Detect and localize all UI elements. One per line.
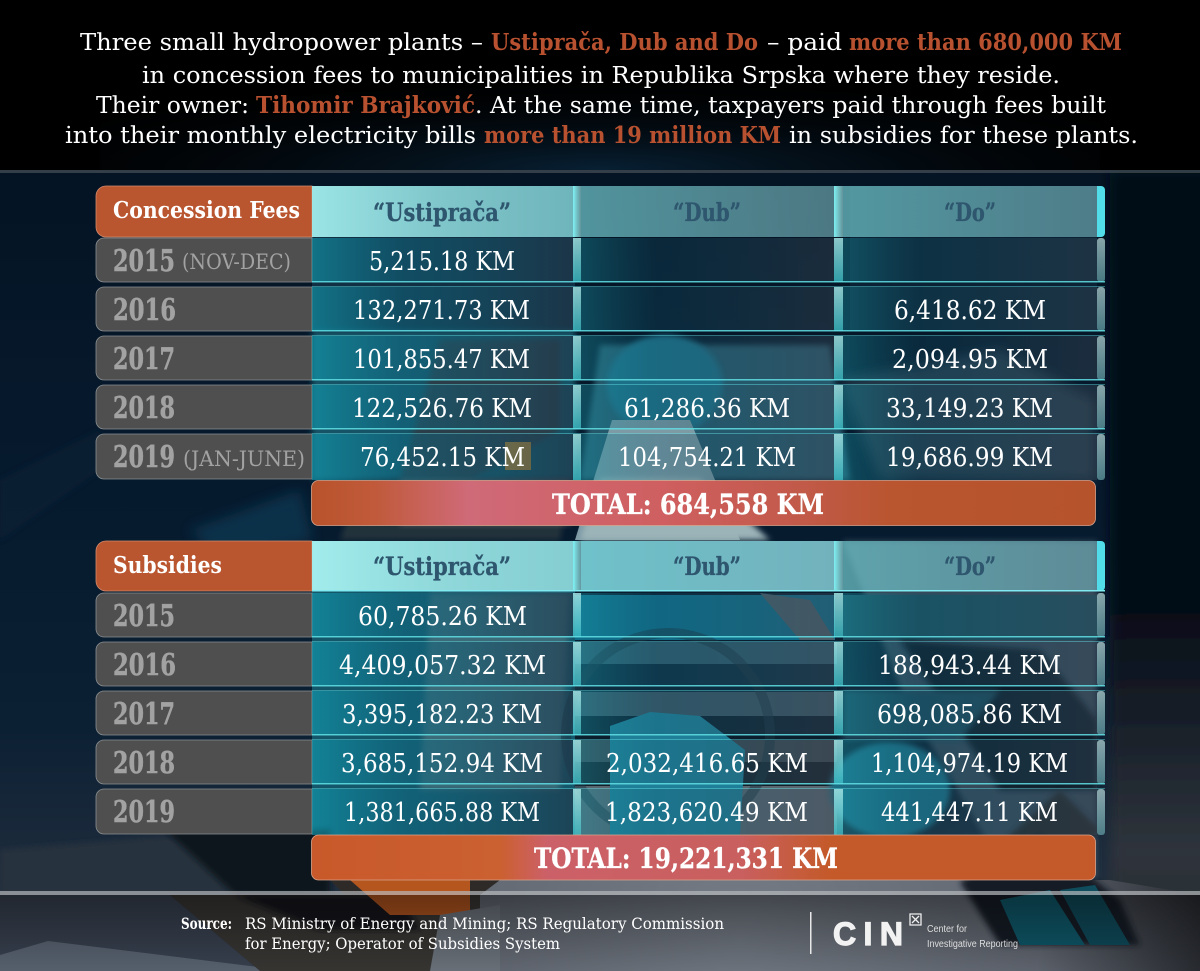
header row: “Ustiprača” (373, 198, 511, 227)
row 2018 (96, 384, 1105, 430)
header row: “Do” (944, 198, 996, 227)
row 2017: 2017 (113, 697, 175, 732)
row 2015: 2015 (113, 244, 175, 279)
intro line 3 (96, 92, 1107, 119)
divider (810, 912, 812, 954)
total bar (312, 835, 1096, 880)
CIN logo: Center for (927, 924, 968, 935)
row 2015: 5,215.18 KM (369, 247, 515, 277)
row 2016 (96, 641, 1105, 686)
row 2017: 3,395,182.23 KM (342, 700, 542, 730)
row 2018: 2018 (113, 391, 175, 426)
header row (96, 186, 1105, 237)
header row: “Ustiprača” (373, 552, 511, 581)
row 2018: 2,032,416.65 KM (606, 749, 808, 779)
header row: “Dub” (673, 198, 741, 227)
row 2015 (96, 593, 1105, 638)
intro line 1: Three small hydropower plants – (80, 30, 483, 56)
row 2019 (96, 433, 1105, 480)
intro line 1: – paid (767, 30, 842, 56)
intro line 4 (65, 122, 1138, 149)
CIN logo: CIN (833, 916, 903, 952)
row 2017 (96, 690, 1105, 736)
intro line 4: into their monthly electricity bills (65, 123, 476, 149)
intro line 4: more than 19 million KM (484, 122, 781, 149)
row 2016: 132,271.73 KM (353, 296, 530, 326)
row 2019: 2019 (113, 440, 175, 475)
row 2019: 76,452.15 KM (360, 443, 525, 473)
row 2018: 1,104,974.19 KM (871, 749, 1068, 779)
source note: RS Ministry of Energy and Mining; RS Regulatory Commission (245, 914, 724, 933)
row 2019: 441,447.11 KM (881, 798, 1058, 828)
row 2017: 101,855.47 KM (353, 345, 530, 375)
header row: “Do” (944, 552, 996, 581)
intro line 3: Their owner: (96, 93, 249, 119)
panel: concession fees table (96, 186, 1105, 526)
row 2019: 2019 (113, 795, 175, 830)
row 2017: 2,094.95 KM (892, 345, 1048, 375)
row 2016: 2016 (113, 293, 176, 328)
intro line 1 (80, 29, 1122, 56)
row 2019: 19,686.99 KM (886, 443, 1053, 473)
row 2019: 104,754.21 KM (618, 443, 796, 473)
row 2017: 698,085.86 KM (877, 700, 1062, 730)
total bar: TOTAL: 19,221,331 KM (534, 842, 838, 875)
panel: subsidies table (96, 541, 1105, 880)
row 2015: (NOV-DEC) (182, 250, 291, 274)
row 2018: 3,685,152.94 KM (341, 749, 543, 779)
total bar: TOTAL: 684,558 KM (552, 488, 824, 521)
row 2016: 4,409,057.32 KM (339, 651, 546, 681)
CIN logo (833, 914, 1018, 952)
row 2016: 2016 (113, 648, 176, 683)
intro line 2: in concession fees to municipalities in Republika Srpska where they reside. (142, 63, 1060, 89)
row 2018 (96, 739, 1105, 784)
row 2018: 122,526.76 KM (352, 394, 532, 424)
source note (181, 914, 724, 953)
intro line 3: . At the same time, taxpayers paid through fees built (475, 93, 1107, 119)
row 2015 (96, 238, 1105, 282)
header row: Concession Fees (113, 197, 300, 224)
CIN logo: Investigative Reporting (927, 939, 1018, 950)
header row: Subsidies (113, 552, 222, 579)
row 2019 (96, 788, 1105, 835)
intro line 1: more than 680,000 KM (849, 29, 1122, 56)
row 2017 (96, 335, 1105, 380)
header row (96, 541, 1105, 592)
icon: logo mark (910, 914, 921, 925)
row 2019: (JAN-JUNE) (183, 447, 305, 471)
footer band (0, 891, 1200, 971)
row 2016 (96, 286, 1105, 332)
row 2016: 6,418.62 KM (894, 296, 1046, 326)
row 2018: 2018 (113, 746, 175, 781)
source note: Source: (181, 914, 232, 933)
total bar (312, 480, 1096, 526)
intro line 3: Tihomir Brajković (256, 92, 475, 119)
header row: “Dub” (673, 552, 741, 581)
top header band (0, 0, 1200, 173)
row 2015: 60,785.26 KM (358, 602, 527, 632)
row 2017: 2017 (113, 342, 175, 377)
row 2016: 188,943.44 KM (878, 651, 1061, 681)
source note: for Energy; Operator of Subsidies System (245, 934, 560, 953)
row 2015: 2015 (113, 599, 175, 634)
intro line 4: in subsidies for these plants. (789, 123, 1138, 149)
row 2019: 1,381,665.88 KM (344, 798, 540, 828)
row 2018: 61,286.36 KM (624, 394, 790, 424)
row 2019: 1,823,620.49 KM (605, 798, 808, 828)
intro line 1: Ustiprača, Dub and Do (491, 29, 758, 56)
row 2018: 33,149.23 KM (886, 394, 1053, 424)
